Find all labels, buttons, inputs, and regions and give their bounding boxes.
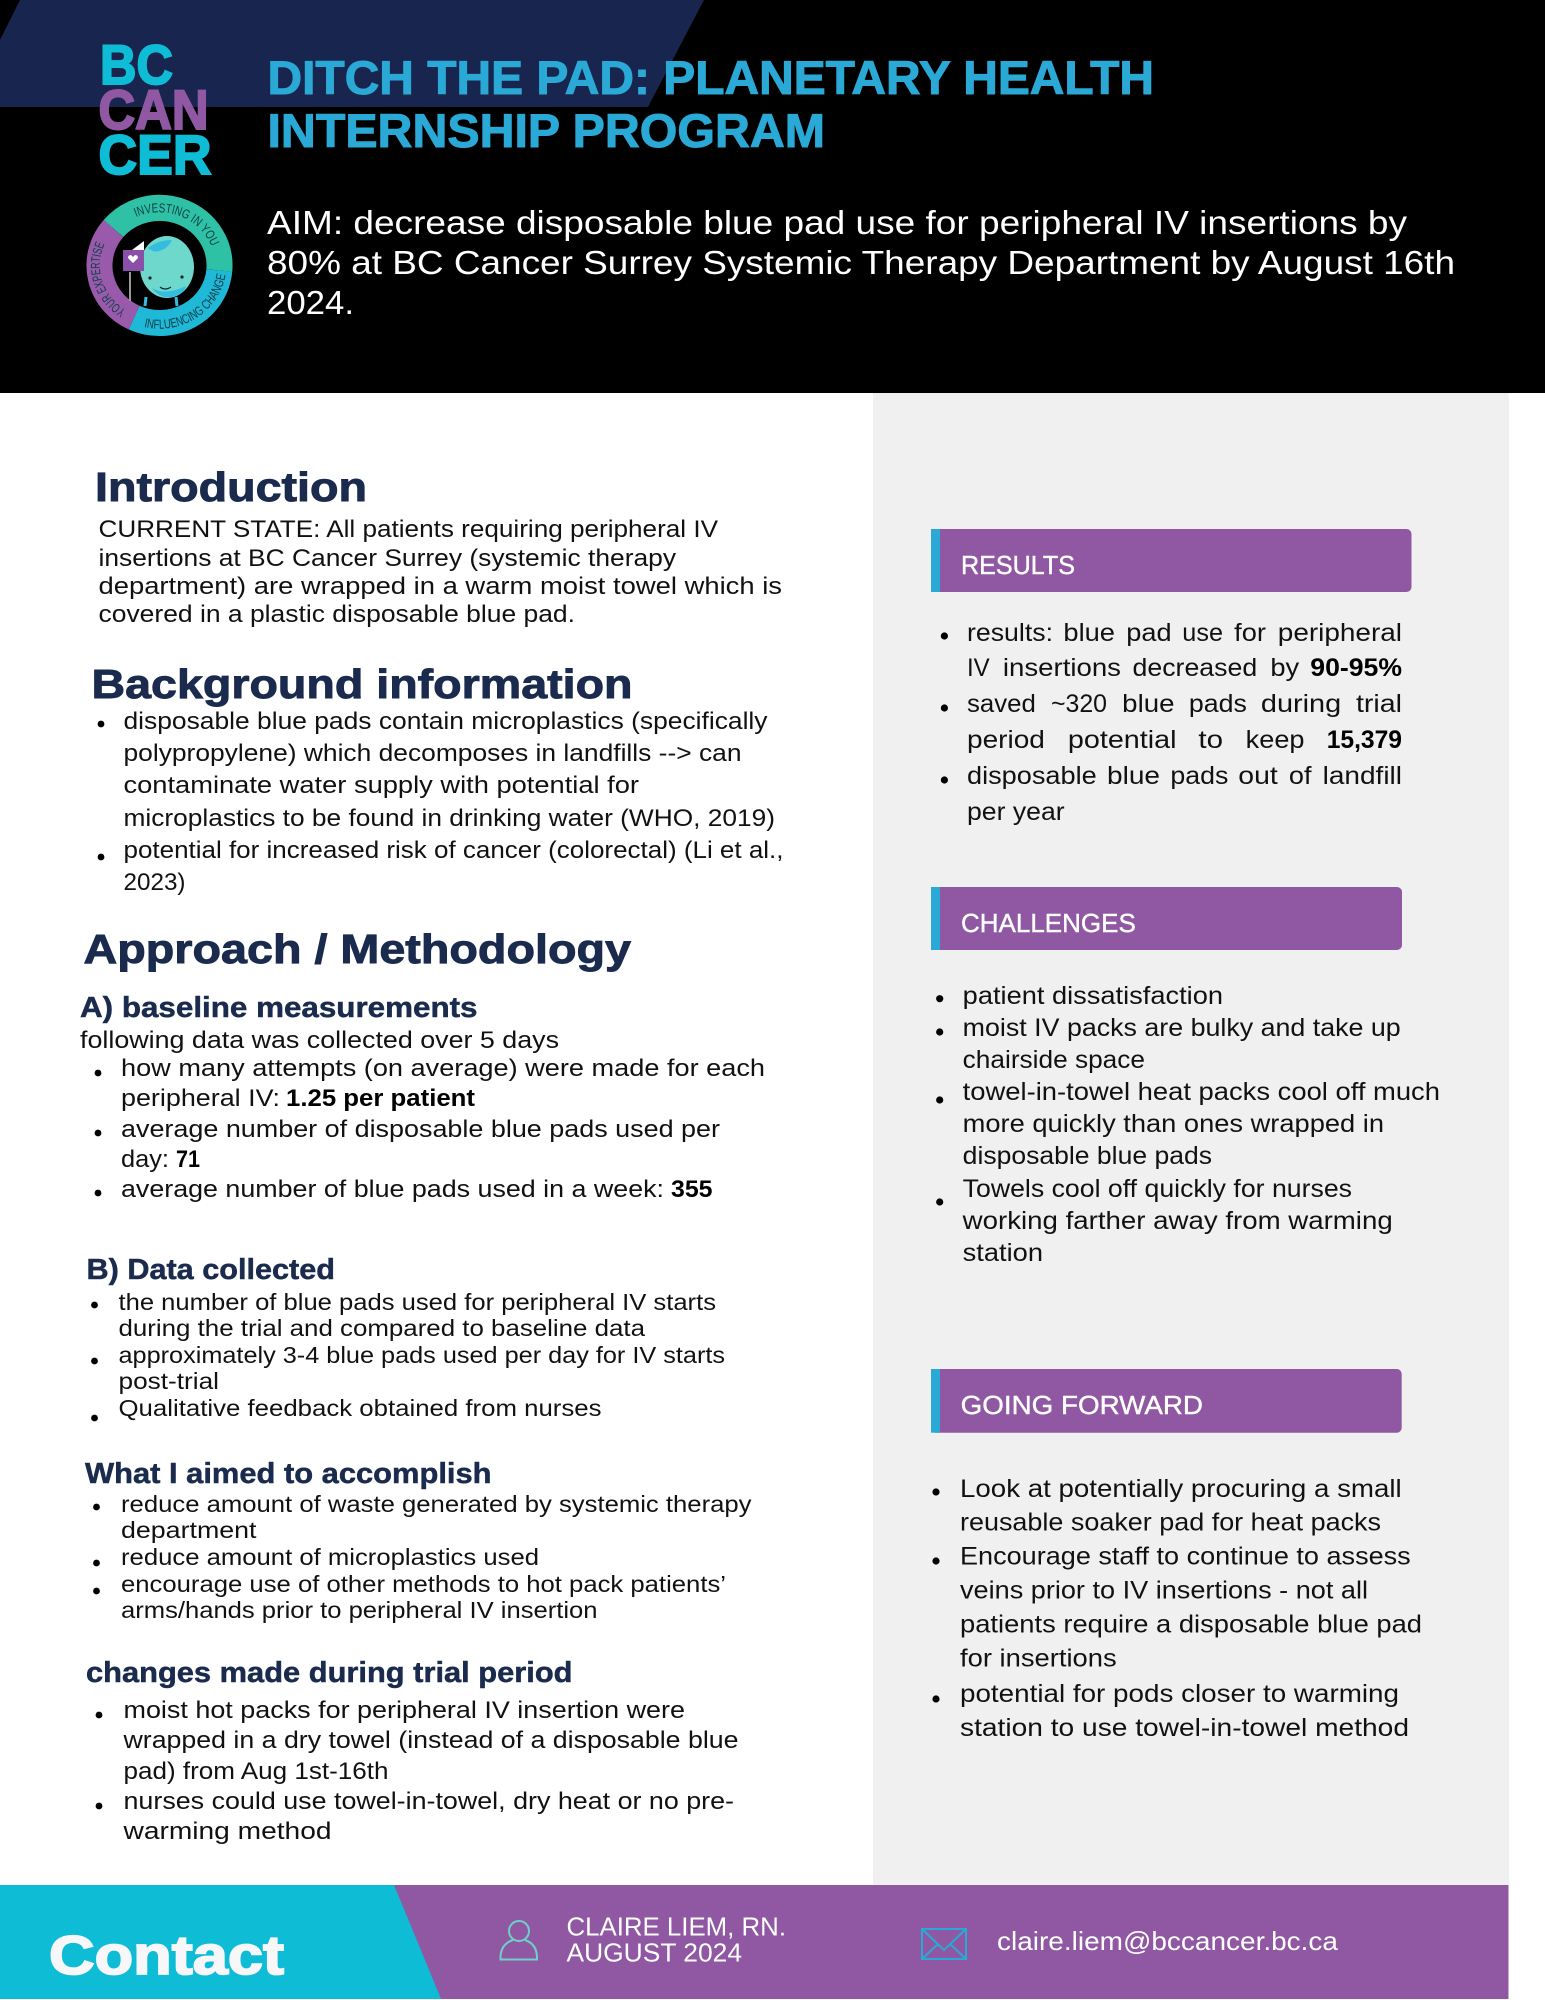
challenges bullet list: towel-in-towel heat packs cool off much — [963, 1078, 1440, 1106]
results bullet list: 15,379 — [1327, 726, 1402, 754]
panel: challenges — [931, 887, 1440, 1267]
section: what I aimed to accomplish — [85, 1458, 752, 1623]
results bullet list: keep — [1246, 726, 1304, 754]
results bullet list: for — [1234, 619, 1266, 647]
challenges bullet list: patient dissatisfaction — [963, 982, 1223, 1010]
going forward bullet list: Encourage staff to continue to assess — [960, 1543, 1411, 1571]
title: DITCH THE PAD: PLANETARY HEALTH — [268, 51, 1154, 104]
bullet list: baseline: 355 — [671, 1176, 712, 1203]
results bullet list: during — [1261, 690, 1341, 718]
navy slanted banner — [0, 0, 704, 107]
bullet list: baseline: how many attempts (on average) were made for each — [121, 1055, 765, 1082]
going forward bullet list: reusable soaker pad for heat packs — [960, 1509, 1381, 1537]
going forward bullet list: potential for pods closer to warming — [960, 1680, 1399, 1708]
text block: current state: covered in a plastic disposable blue pad. — [98, 601, 575, 628]
results bullet list: decreased — [1132, 654, 1257, 682]
badge: planetary health globe: INFLUENCING CHANGE — [144, 274, 226, 329]
challenges bullet list: disposable blue pads — [963, 1142, 1212, 1170]
results bullet list: pads — [1189, 690, 1247, 718]
challenges bullet list — [936, 982, 1440, 1267]
results bullet list: of — [1289, 762, 1312, 790]
aim statement: 80% at BC Cancer Surrey Systemic Therapy Department by August 16th — [267, 244, 1455, 281]
logo: BC Cancer: CAN — [98, 78, 208, 141]
going forward bullet list: veins prior to IV insertions - not all — [960, 1577, 1368, 1605]
challenges header bar — [931, 887, 1402, 950]
heading: background information: Background information — [92, 661, 632, 707]
results bullet list: blue — [1063, 619, 1115, 647]
challenges bullet list: Towels cool off quickly for nurses — [963, 1175, 1352, 1203]
bullet list: data collected: during the trial and compared to baseline data — [118, 1315, 645, 1341]
logo: BC Cancer: CER — [98, 123, 212, 186]
bullet list: data collected — [91, 1289, 725, 1421]
bullet list: background: disposable blue pads contain microplastics (specifically — [124, 708, 768, 735]
section: approach and methodology — [80, 926, 765, 1203]
challenges bullet list: moist IV packs are bulky and take up — [963, 1014, 1401, 1042]
bullet list: baseline: 1.25 per patient — [286, 1085, 475, 1112]
bullet list: changes: pad) from Aug 1st-16th — [124, 1758, 388, 1785]
text block: current state: insertions at BC Cancer Surrey (systemic therapy — [98, 545, 676, 572]
footer: contact band — [0, 1885, 1508, 1999]
logo: BC Cancer — [98, 33, 212, 186]
logo: BC Cancer: BC — [100, 33, 173, 96]
bullet list: changes: wrapped in a dry towel (instead of a disposable blue — [122, 1727, 738, 1754]
results bullet list: blue — [1107, 762, 1160, 790]
results bullet list: saved — [967, 690, 1036, 718]
going forward bullet list: station to use towel-in-towel method — [960, 1714, 1409, 1742]
bullet list: background: 2023) — [124, 869, 186, 896]
results bullet list: peripheral — [1278, 619, 1402, 647]
going forward bullet list: patients require a disposable blue pad — [960, 1611, 1422, 1639]
results bullet list: pads — [1170, 762, 1228, 790]
bullet list: data collected: approximately 3-4 blue pads used per day for IV starts — [118, 1342, 725, 1368]
bullet list: baseline: peripheral IV: — [121, 1085, 280, 1112]
results bullet list: trial — [1356, 690, 1402, 718]
challenges bullet list: more quickly than ones wrapped in — [963, 1110, 1384, 1138]
text: data collection note: following data was collected over 5 days — [80, 1027, 559, 1054]
aim statement — [267, 204, 1455, 321]
heading: approach / methodology: Approach / Methodology — [84, 926, 631, 972]
results bullet list: IV — [967, 654, 990, 682]
icon: globe character — [123, 236, 194, 306]
text: author and date: CLAIRE LIEM, RN. — [566, 1912, 786, 1942]
section: background information — [92, 661, 784, 896]
badge: planetary health globe — [86, 194, 233, 336]
bullet list: aims: reduce amount of microplastics used — [121, 1544, 539, 1570]
text: author and date — [566, 1912, 786, 1968]
results bullet list: disposable — [967, 762, 1097, 790]
text block: current state: department) are wrapped in a warm moist towel which is — [98, 573, 782, 600]
bullet list: baseline: 71 — [176, 1146, 200, 1173]
results bullet list: potential — [1068, 726, 1176, 754]
title — [268, 51, 1154, 157]
subheading: changes made during trial period: changes made during trial period — [86, 1657, 572, 1689]
badge: planetary health globe: YOUR EXPERTISE — [90, 241, 124, 318]
going forward bullet list: for insertions — [960, 1645, 1117, 1673]
results header bar — [931, 529, 1412, 592]
subheading: what I aimed to accomplish: What I aimed to accomplish — [85, 1458, 492, 1490]
panel: results — [931, 529, 1412, 826]
bullet list: data collected: Qualitative feedback obtained from nurses — [118, 1395, 602, 1421]
results bullet list: 90-95% — [1310, 654, 1402, 682]
bullet list: baseline: average number of disposable blue pads used per — [121, 1116, 720, 1143]
results bullet list: by — [1270, 654, 1300, 682]
results bullet list: use — [1182, 619, 1223, 647]
text block: current state: CURRENT STATE: All patients requiring peripheral IV — [98, 516, 718, 543]
bullet list: data collected: post-trial — [118, 1368, 219, 1394]
results bullet list: results: — [967, 619, 1053, 647]
bullet list: background: polypropylene) which decomposes in landfills --> can — [124, 740, 742, 767]
going forward header bar — [931, 1369, 1402, 1433]
bullet list: aims: reduce amount of waste generated by systemic therapy — [121, 1491, 752, 1517]
challenges bullet list: station — [963, 1239, 1043, 1267]
bullet list: changes — [96, 1697, 739, 1845]
bullet list: background: contaminate water supply with potential for — [124, 772, 639, 799]
bullet list: changes: warming method — [122, 1818, 332, 1845]
header band — [0, 0, 1545, 393]
results bullet list: to — [1198, 726, 1223, 754]
results bullet list: blue — [1122, 690, 1174, 718]
challenges bullet list: working farther away from warming — [962, 1207, 1393, 1235]
bullet list: aims: arms/hands prior to peripheral IV insertion — [121, 1597, 598, 1623]
text block: current state — [98, 516, 782, 628]
challenges bullet list: chairside space — [963, 1046, 1145, 1074]
going forward header bar: GOING FORWARD — [961, 1390, 1203, 1420]
going forward bullet list: Look at potentially procuring a small — [960, 1475, 1402, 1503]
bullet list: changes: moist hot packs for peripheral IV insertion were — [124, 1697, 685, 1724]
bullet list: changes: nurses could use towel-in-towel, dry heat or no pre- — [124, 1788, 734, 1815]
results bullet list: out — [1238, 762, 1278, 790]
bullet list: data collected: the number of blue pads used for peripheral IV starts — [118, 1289, 716, 1315]
results header bar: RESULTS — [961, 550, 1075, 580]
results bullet list: period — [967, 726, 1045, 754]
bullet list: background — [98, 708, 784, 896]
text: author and date: AUGUST 2024 — [566, 1938, 742, 1968]
panel: right column background — [873, 393, 1509, 1885]
bullet list: aims — [93, 1491, 752, 1623]
icon: envelope — [922, 1929, 966, 1959]
bullet list: background: microplastics to be found in drinking water (WHO, 2019) — [124, 805, 775, 832]
aim statement: AIM: decrease disposable blue pad use for peripheral IV insertions by — [267, 204, 1408, 241]
icon: person — [500, 1921, 537, 1960]
results bullet list: landfill — [1323, 762, 1402, 790]
heading: contact: Contact — [49, 1924, 284, 1986]
results bullet list: pad — [1126, 619, 1172, 647]
bullet list: baseline: average number of blue pads used in a week: — [121, 1176, 664, 1203]
subheading: data collected: B) Data collected — [86, 1254, 335, 1286]
bullet list: background: potential for increased risk of cancer (colorectal) (Li et al., — [124, 837, 784, 864]
badge: planetary health globe: INVESTING IN YOU — [134, 203, 220, 245]
section: data collected — [86, 1254, 725, 1421]
results bullet list: insertions — [1003, 654, 1121, 682]
bullet list: aims: department — [121, 1517, 257, 1543]
going forward bullet list — [932, 1475, 1422, 1742]
text: email: claire.liem@bccancer.bc.ca — [997, 1926, 1339, 1956]
results bullet list: per year — [967, 798, 1065, 826]
results bullet list: ~320 — [1051, 690, 1107, 718]
aim statement: 2024. — [267, 284, 354, 321]
bullet list: baseline — [95, 1055, 765, 1203]
challenges header bar: CHALLENGES — [961, 908, 1136, 938]
subheading: baseline measurements: A) baseline measurements — [80, 992, 478, 1024]
section: changes made during trial period — [86, 1657, 738, 1845]
bullet list: aims: encourage use of other methods to hot pack patients’ — [121, 1571, 726, 1597]
bullet list: baseline: day: — [121, 1146, 169, 1173]
results bullet list — [941, 619, 1402, 826]
panel: going forward — [931, 1369, 1422, 1742]
title: INTERNSHIP PROGRAM — [268, 104, 825, 157]
section: introduction — [95, 464, 782, 628]
heading: introduction: Introduction — [95, 464, 367, 510]
